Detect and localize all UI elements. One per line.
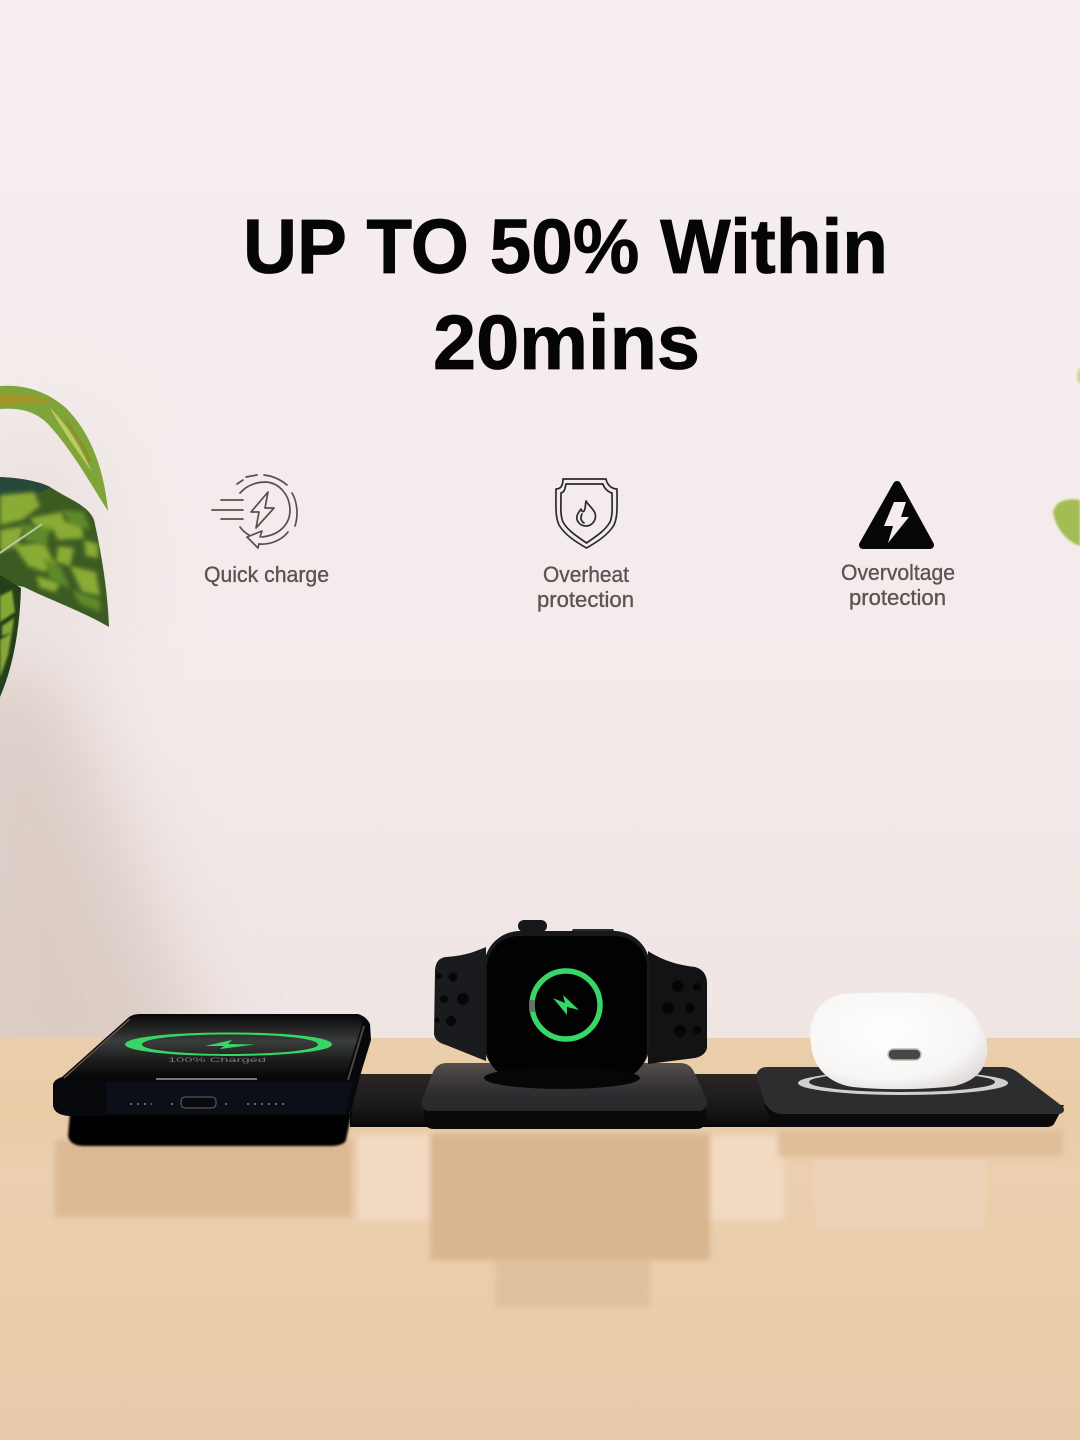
label: quick charge: Quick charge — [204, 562, 329, 587]
feature: overheat protection — [537, 479, 634, 612]
usb-c port — [888, 1049, 921, 1060]
mat connecting band — [350, 1074, 1000, 1127]
phone shadow — [68, 1112, 352, 1146]
watch strap right — [648, 951, 707, 1064]
feature: quick charge — [204, 475, 329, 587]
plant: left leaves — [0, 386, 109, 697]
charging ring on phone — [125, 1032, 332, 1056]
label: overheat protection — [537, 562, 634, 612]
label: overvoltage protection — [841, 560, 955, 610]
leaf: middle — [0, 477, 109, 627]
product: watch — [434, 920, 707, 1089]
watch base — [484, 1067, 640, 1089]
label: overheat protection: Overheat — [543, 562, 629, 587]
product: charging mat — [350, 1063, 1064, 1129]
table surface — [0, 1038, 1080, 1440]
case shell — [810, 992, 988, 1089]
plant: right leaf edge — [1053, 367, 1080, 546]
watch case — [484, 931, 650, 1079]
phone screen — [66, 1016, 361, 1079]
table reflections — [55, 1130, 1063, 1308]
right pad — [756, 1067, 1064, 1127]
icon: shield with flame — [556, 479, 617, 548]
phone port and speakers — [130, 1079, 288, 1108]
title: UP TO 50% Within — [243, 204, 888, 290]
product: earbuds case — [810, 992, 988, 1089]
watch charging ring — [532, 971, 600, 1039]
leaf: upper — [0, 386, 108, 511]
title — [243, 204, 888, 386]
label: overvoltage protection: protection — [849, 585, 946, 610]
title: 20mins — [433, 300, 700, 386]
icon: speeding lightning bolt — [212, 475, 297, 548]
watch strap left — [434, 947, 486, 1061]
product: phone — [53, 1014, 371, 1146]
label: overvoltage protection: Overvoltage — [841, 560, 955, 585]
phone screen caption: 100% Charged — [168, 1058, 266, 1064]
phone body — [53, 1014, 371, 1116]
leaf: lower — [0, 575, 21, 697]
feature: overvoltage protection — [841, 485, 955, 610]
charging ring — [798, 1071, 1008, 1095]
wall background — [0, 438, 1080, 1038]
label: overheat protection: protection — [537, 587, 634, 612]
icon: warning triangle with bolt — [863, 485, 930, 545]
watch crown and button — [518, 920, 547, 932]
center pad — [422, 1063, 707, 1129]
